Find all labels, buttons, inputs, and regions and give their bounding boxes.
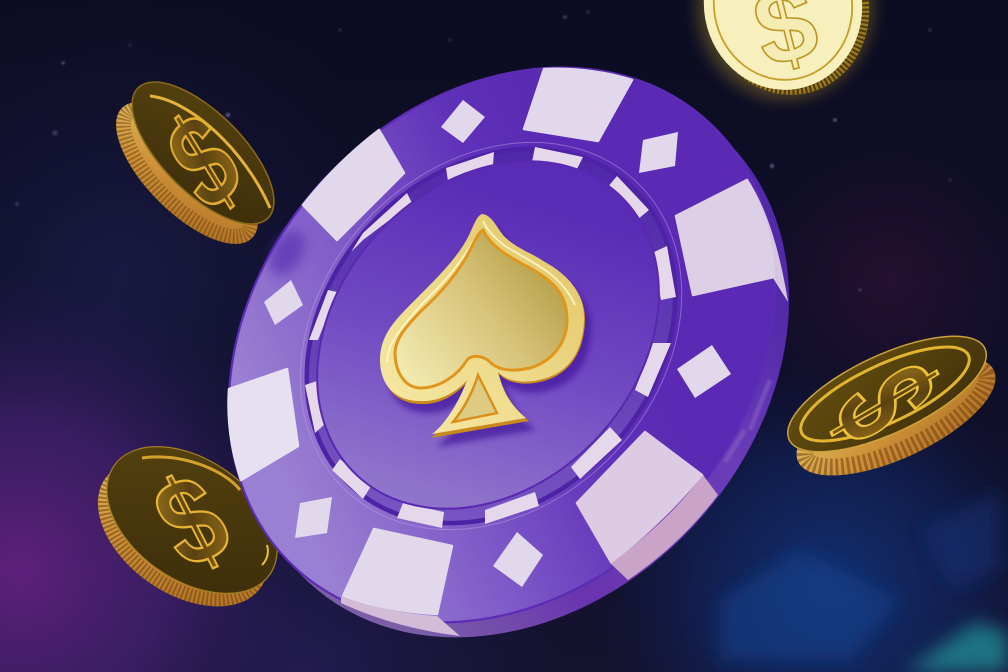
dollar sign: bottom left coin: $: [134, 448, 249, 595]
dollar sign: top left coin: $: [146, 83, 261, 239]
rim diamonds: small: [264, 100, 731, 587]
rim shadow blotch: [262, 225, 312, 281]
rim squares: large: [228, 69, 774, 614]
ring dashes: [305, 147, 676, 528]
spade emblem: [380, 214, 591, 447]
dollar sign: right coin: $: [804, 339, 968, 465]
coin: glowing top right: [690, 0, 883, 108]
coin: top left: [116, 81, 275, 244]
inner ring band: [231, 74, 751, 598]
chip side thickness: [243, 83, 789, 637]
coin: right: [787, 336, 996, 476]
spade stem inner: [453, 375, 497, 422]
coin: bottom left: [71, 416, 304, 637]
spade edge highlight: [387, 221, 575, 362]
side highlights under squares: [341, 178, 788, 636]
chip face: [229, 68, 775, 622]
spade heart inner: [395, 230, 567, 388]
inner disc: [247, 92, 729, 578]
poker chip: [222, 65, 789, 637]
